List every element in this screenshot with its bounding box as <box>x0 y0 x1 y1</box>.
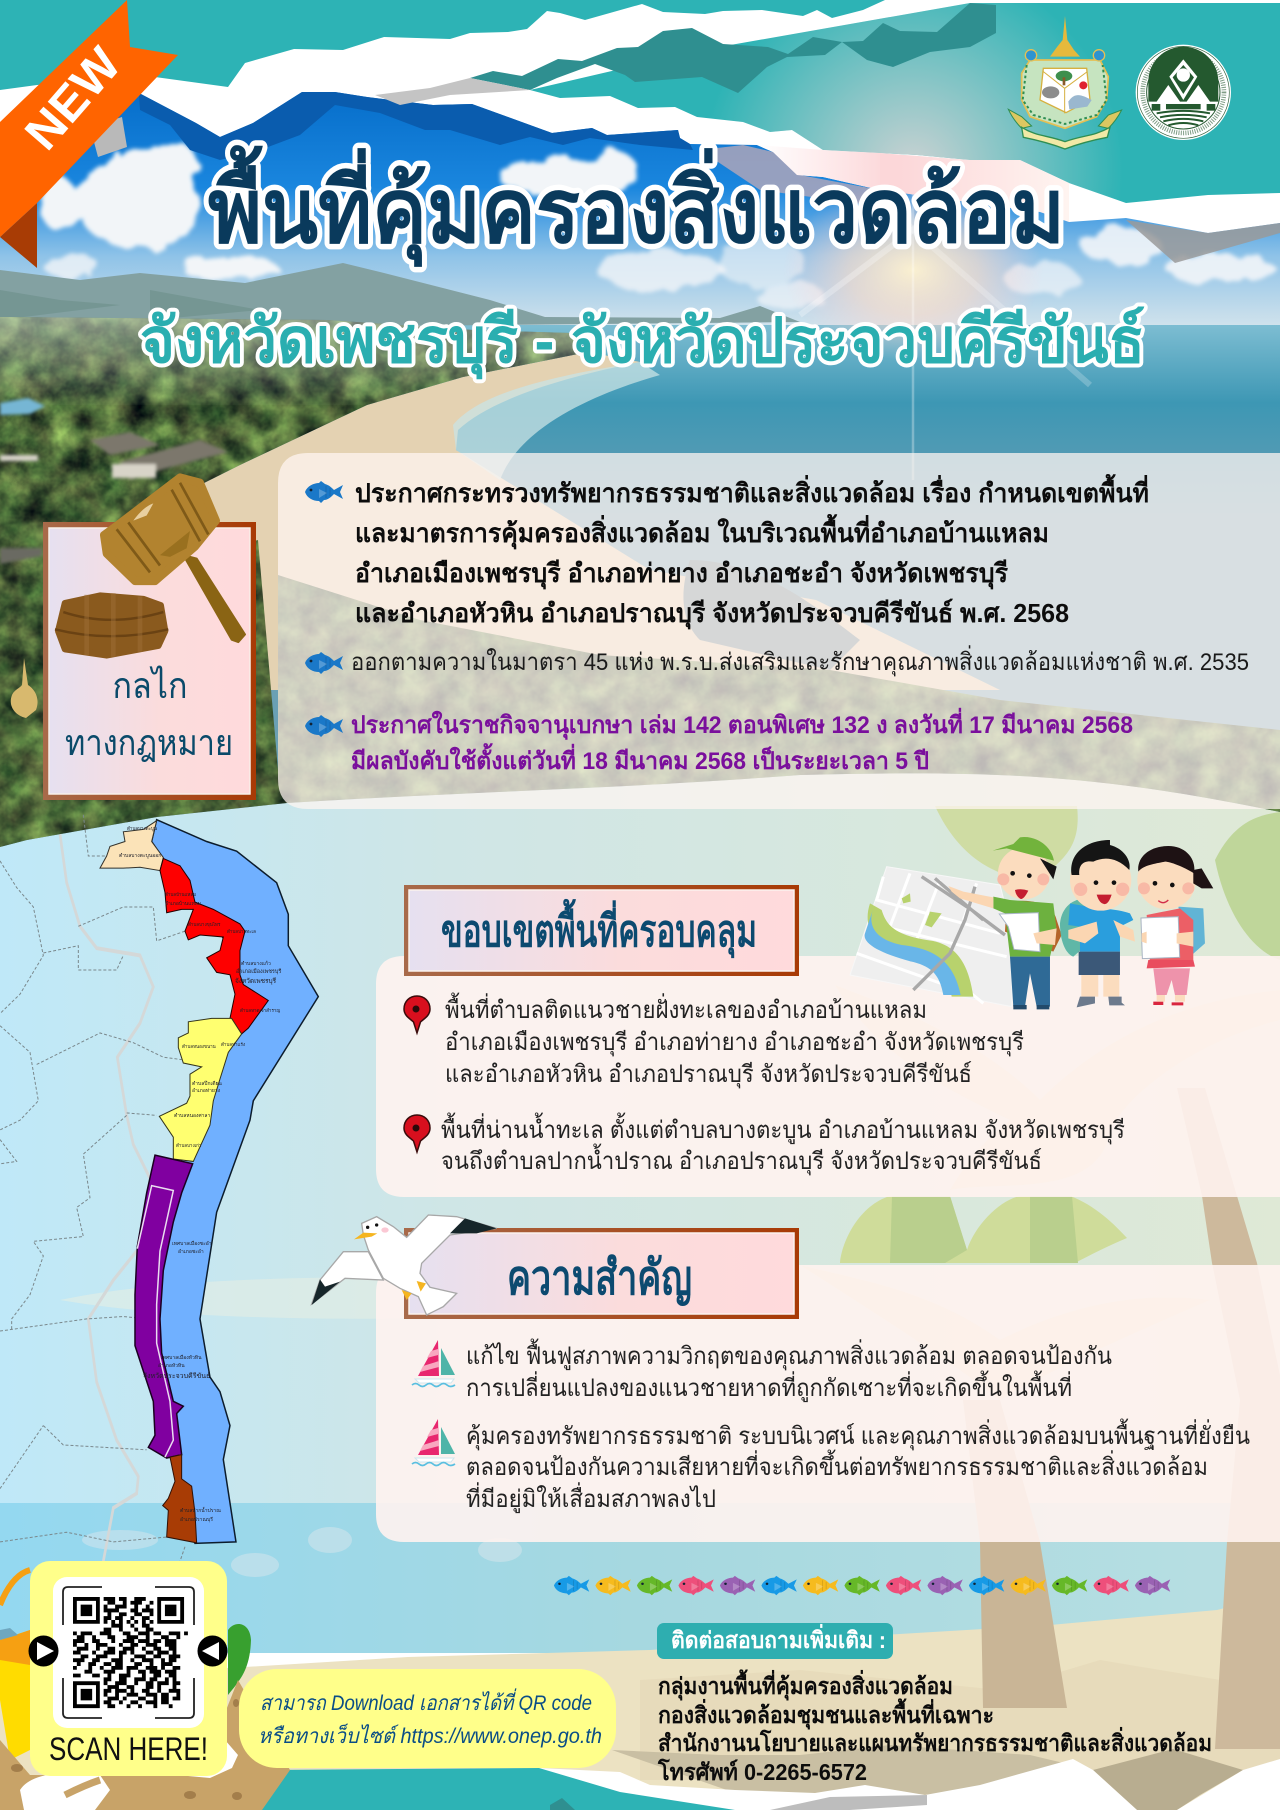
houses <box>0 398 228 564</box>
map labels: ตำบลบางขุนไทร <box>188 921 221 928</box>
icon: fish bullet <box>305 481 343 503</box>
map labels: ตำบลบ้านแหลม <box>165 891 196 897</box>
torn paper banner: top <box>0 0 1280 263</box>
panel: legal mechanism <box>43 478 256 800</box>
map labels: ตำบลปากน้ำปราณ <box>180 1505 221 1514</box>
background: pastel beach illustration <box>0 770 1280 1810</box>
right teal <box>530 3 1280 203</box>
panel: coverage scope <box>376 837 1280 1197</box>
importance item 2: ที่มีอยู่มิให้เสื่อมสภาพลงไป <box>466 1482 716 1514</box>
child in the middle <box>1060 898 1088 957</box>
icon: fish bullet <box>305 652 343 674</box>
importance item 1: การเปลี่ยนแปลงของแนวชายหาดที่ถูกกัดเซาะที่จะเกิดขึ้นในพื้นที่ <box>466 1370 1072 1403</box>
announcement text: และมาตรการคุ้มครองสิ่งแวดล้อม ในบริเวณพื้นที่อำเภอบ้านแหลม <box>355 513 1049 550</box>
photo foreground land <box>0 317 588 850</box>
top teal <box>0 0 885 90</box>
contact details: สำนักงานนโยบายและแผนทรัพยากรธรรมชาติและสิ่งแวดล้อม <box>658 1726 1212 1756</box>
map labels: อำเภอหัวหิน <box>158 1362 185 1369</box>
logo: ONEP seal <box>1136 45 1231 140</box>
heading: coverage scope <box>404 885 799 976</box>
illustration: bucket and sand <box>0 1570 290 1810</box>
scope item 2 <box>441 1112 1125 1176</box>
panel: legal announcement <box>278 453 1280 809</box>
district boundaries <box>0 815 185 1571</box>
cliff below the panel <box>278 575 1280 812</box>
map labels: จังหวัดประจวบคีรีขันธ์ <box>143 1372 210 1380</box>
blue mountains <box>139 92 693 160</box>
logo: provincial crest <box>1008 16 1122 149</box>
map labels: อำเภอท่ายาง <box>192 1088 221 1094</box>
map labels: เทศบาลเมืองชะอำ <box>172 1240 212 1247</box>
map labels: ตำบลบางตะบูน <box>127 825 157 832</box>
contact heading: ติดต่อสอบถามเพิ่มเติม : <box>671 1623 886 1653</box>
QR code <box>73 1597 188 1708</box>
beige zone <box>100 821 163 871</box>
announcement text <box>355 473 1149 630</box>
mechanism label: กลไก <box>112 665 188 706</box>
gazette text: มีผลบังคับใช้ตั้งแต่วันที่ 18 มีนาคม 2568 เป็นระยะเวลา 5 ปี <box>351 742 929 775</box>
background: photo of the beach <box>0 92 1280 847</box>
scan label: SCAN HERE! <box>49 1731 208 1767</box>
icon: sailboat <box>412 1340 455 1386</box>
pink band <box>757 145 880 190</box>
map labels <box>119 825 281 1523</box>
contact details: กองสิ่งแวดล้อมชุมชนและพื้นที่เฉพาะ <box>658 1698 994 1730</box>
panel: importance <box>312 1215 1280 1542</box>
sea <box>440 325 1280 655</box>
sun flare <box>755 50 1090 480</box>
icon: fish bullet <box>305 715 343 737</box>
icon: seagull <box>312 1215 497 1315</box>
icon: sailboat <box>412 1419 455 1466</box>
red zone <box>160 858 268 1034</box>
gavel head <box>104 478 216 581</box>
scope item 1 <box>445 992 1024 1089</box>
announcement text: และอำเภอหัวหิน อำเภอปราณบุรี จังหวัดประจวบคีรีขันธ์ พ.ศ. 2568 <box>355 598 1069 630</box>
road <box>60 834 153 1561</box>
map labels: อำเภอบ้านแหลม <box>165 900 201 907</box>
map labels: จังหวัดเพชรบุรี <box>235 977 277 985</box>
mechanism label: ทางกฎหมาย <box>65 722 233 763</box>
callout: download note <box>239 1669 616 1768</box>
gazette text: ประกาศในราชกิจจานุเบกษา เล่ม 142 ตอนพิเศษ 132 ง ลงวันที่ 17 มีนาคม 2568 <box>351 707 1133 741</box>
contact heading <box>657 1623 893 1659</box>
announcement text: ประกาศกระทรวงทรัพยากรธรรมชาติและสิ่งแวดล้อม เรื่อง กำหนดเขตพื้นที่ <box>355 473 1149 508</box>
title: พื้นที่คุ้มครองสิ่งแวดล้อม <box>208 145 1065 268</box>
dark teal <box>470 3 996 93</box>
map labels: เทศบาลเมืองหัวหิน <box>161 1354 202 1361</box>
golden pagoda <box>11 658 38 718</box>
heading: coverage scope: ขอบเขตพื้นที่ครอบคลุม <box>441 898 757 959</box>
row of colourful fish <box>554 1576 1170 1595</box>
map labels: ตำบลหาดเจ้าสำราญ <box>240 1007 280 1013</box>
scan arrow right <box>198 1636 228 1666</box>
illustration: kids with map <box>850 837 1213 1009</box>
scan arrow left <box>28 1636 58 1666</box>
grey shadows <box>1126 220 1280 263</box>
NEW corner ribbon <box>0 0 178 268</box>
brown zone <box>163 1455 197 1543</box>
child pointing <box>1005 901 1062 952</box>
map labels: อำเภอชะอำ <box>178 1249 204 1255</box>
icon: red map pin <box>404 1115 430 1152</box>
gazette text <box>351 707 1133 775</box>
yellow zone <box>159 1018 242 1161</box>
clouds <box>40 141 1275 310</box>
map labels: ตำบลบางเก่า <box>176 1142 202 1148</box>
scope item 2: พื้นที่น่านน้ำทะเล ตั้งแต่ตำบลบางตะบูน อำเภอบ้านแหลม จังหวัดเพชรบุรี <box>441 1112 1125 1145</box>
importance item 1: แก้ไข ฟื้นฟูสภาพความวิกฤตของคุณภาพสิ่งแวดล้อม ตลอดจนป้องกัน <box>466 1338 1112 1371</box>
importance item 2 <box>466 1418 1250 1514</box>
contact details: กลุ่มงานพื้นที่คุ้มครองสิ่งแวดล้อม <box>658 1669 953 1701</box>
mechanism label <box>65 665 233 763</box>
child with ponytail <box>1178 907 1205 957</box>
scope item 1: และอำเภอหัวหิน อำเภอปราณบุรี จังหวัดประจวบคีรีขันธ์ <box>445 1060 972 1089</box>
scan frame corners <box>63 1587 194 1718</box>
gavel handle <box>183 555 245 642</box>
map labels: ตำบลบางตะบูนออก <box>119 853 161 859</box>
heading: importance <box>404 1228 799 1319</box>
scope item 1: พื้นที่ตำบลติดแนวชายฝั่งทะเลของอำเภอบ้านแหลม <box>445 992 927 1024</box>
contact details: โทรศัพท์ 0-2265-6572 <box>657 1758 867 1785</box>
background: palm trees <box>800 806 1280 1749</box>
QR card <box>28 1561 228 1776</box>
map labels: ตำบลหนองขนาน <box>182 1043 216 1049</box>
subtitle: จังหวัดเพชรบุรี - จังหวัดประจวบคีรีขันธ์ <box>140 306 1145 379</box>
announcement text: อำเภอเมืองเพชรบุรี อำเภอท่ายาง อำเภอชะอำ จังหวัดเพชรบุรี <box>355 558 1008 590</box>
distant mountains <box>0 263 800 330</box>
sand and shore <box>150 352 1000 690</box>
map labels: ตำบลปากทะเล <box>227 928 256 934</box>
importance item 1 <box>466 1338 1112 1403</box>
purple zone <box>135 1155 193 1458</box>
map labels: ตำบลปึกเตียน <box>192 1080 222 1087</box>
callout: download note: สามารถ Download เอกสารได้ที่ QR code <box>260 1688 592 1715</box>
gavel illustration <box>55 478 245 657</box>
torn paper banner: bottom <box>261 1745 1280 1810</box>
map labels: อำเภอปราณบุรี <box>180 1516 213 1523</box>
map labels: ตำบลหนองศาลา <box>174 1113 210 1119</box>
map labels: อำเภอเมืองเพชรบุรี <box>236 968 281 975</box>
white band <box>0 0 1280 233</box>
scope item 1: อำเภอเมืองเพชรบุรี อำเภอท่ายาง อำเภอชะอำ จังหวัดเพชรบุรี <box>445 1029 1024 1057</box>
icon: red map pin <box>404 996 430 1033</box>
map labels: ตำบลท่าแร้ง <box>221 1041 245 1047</box>
gavel block <box>55 593 168 657</box>
callout: download note: หรือทางเว็บไซต์ https://www.onep.go.th <box>258 1723 602 1748</box>
NEW corner ribbon: NEW <box>15 37 132 160</box>
map labels: ตำบลบางแก้ว <box>241 960 271 967</box>
contact section <box>657 1623 1212 1785</box>
map of protected area <box>0 815 318 1571</box>
contact details <box>657 1669 1212 1785</box>
importance item 2: ตลอดจนป้องกันความเสียหายที่จะเกิดขึ้นต่อทรัพยากรธรรมชาติและสิ่งแวดล้อม <box>466 1449 1208 1481</box>
scope item 2: จนถึงตำบลปากน้ำปราณ อำเภอปราณบุรี จังหวัดประจวบคีรีขันธ์ <box>441 1143 1042 1176</box>
sea zone <box>147 820 318 1543</box>
heading: importance: ความสำคัญ <box>507 1252 692 1306</box>
grey shadow <box>375 78 530 105</box>
